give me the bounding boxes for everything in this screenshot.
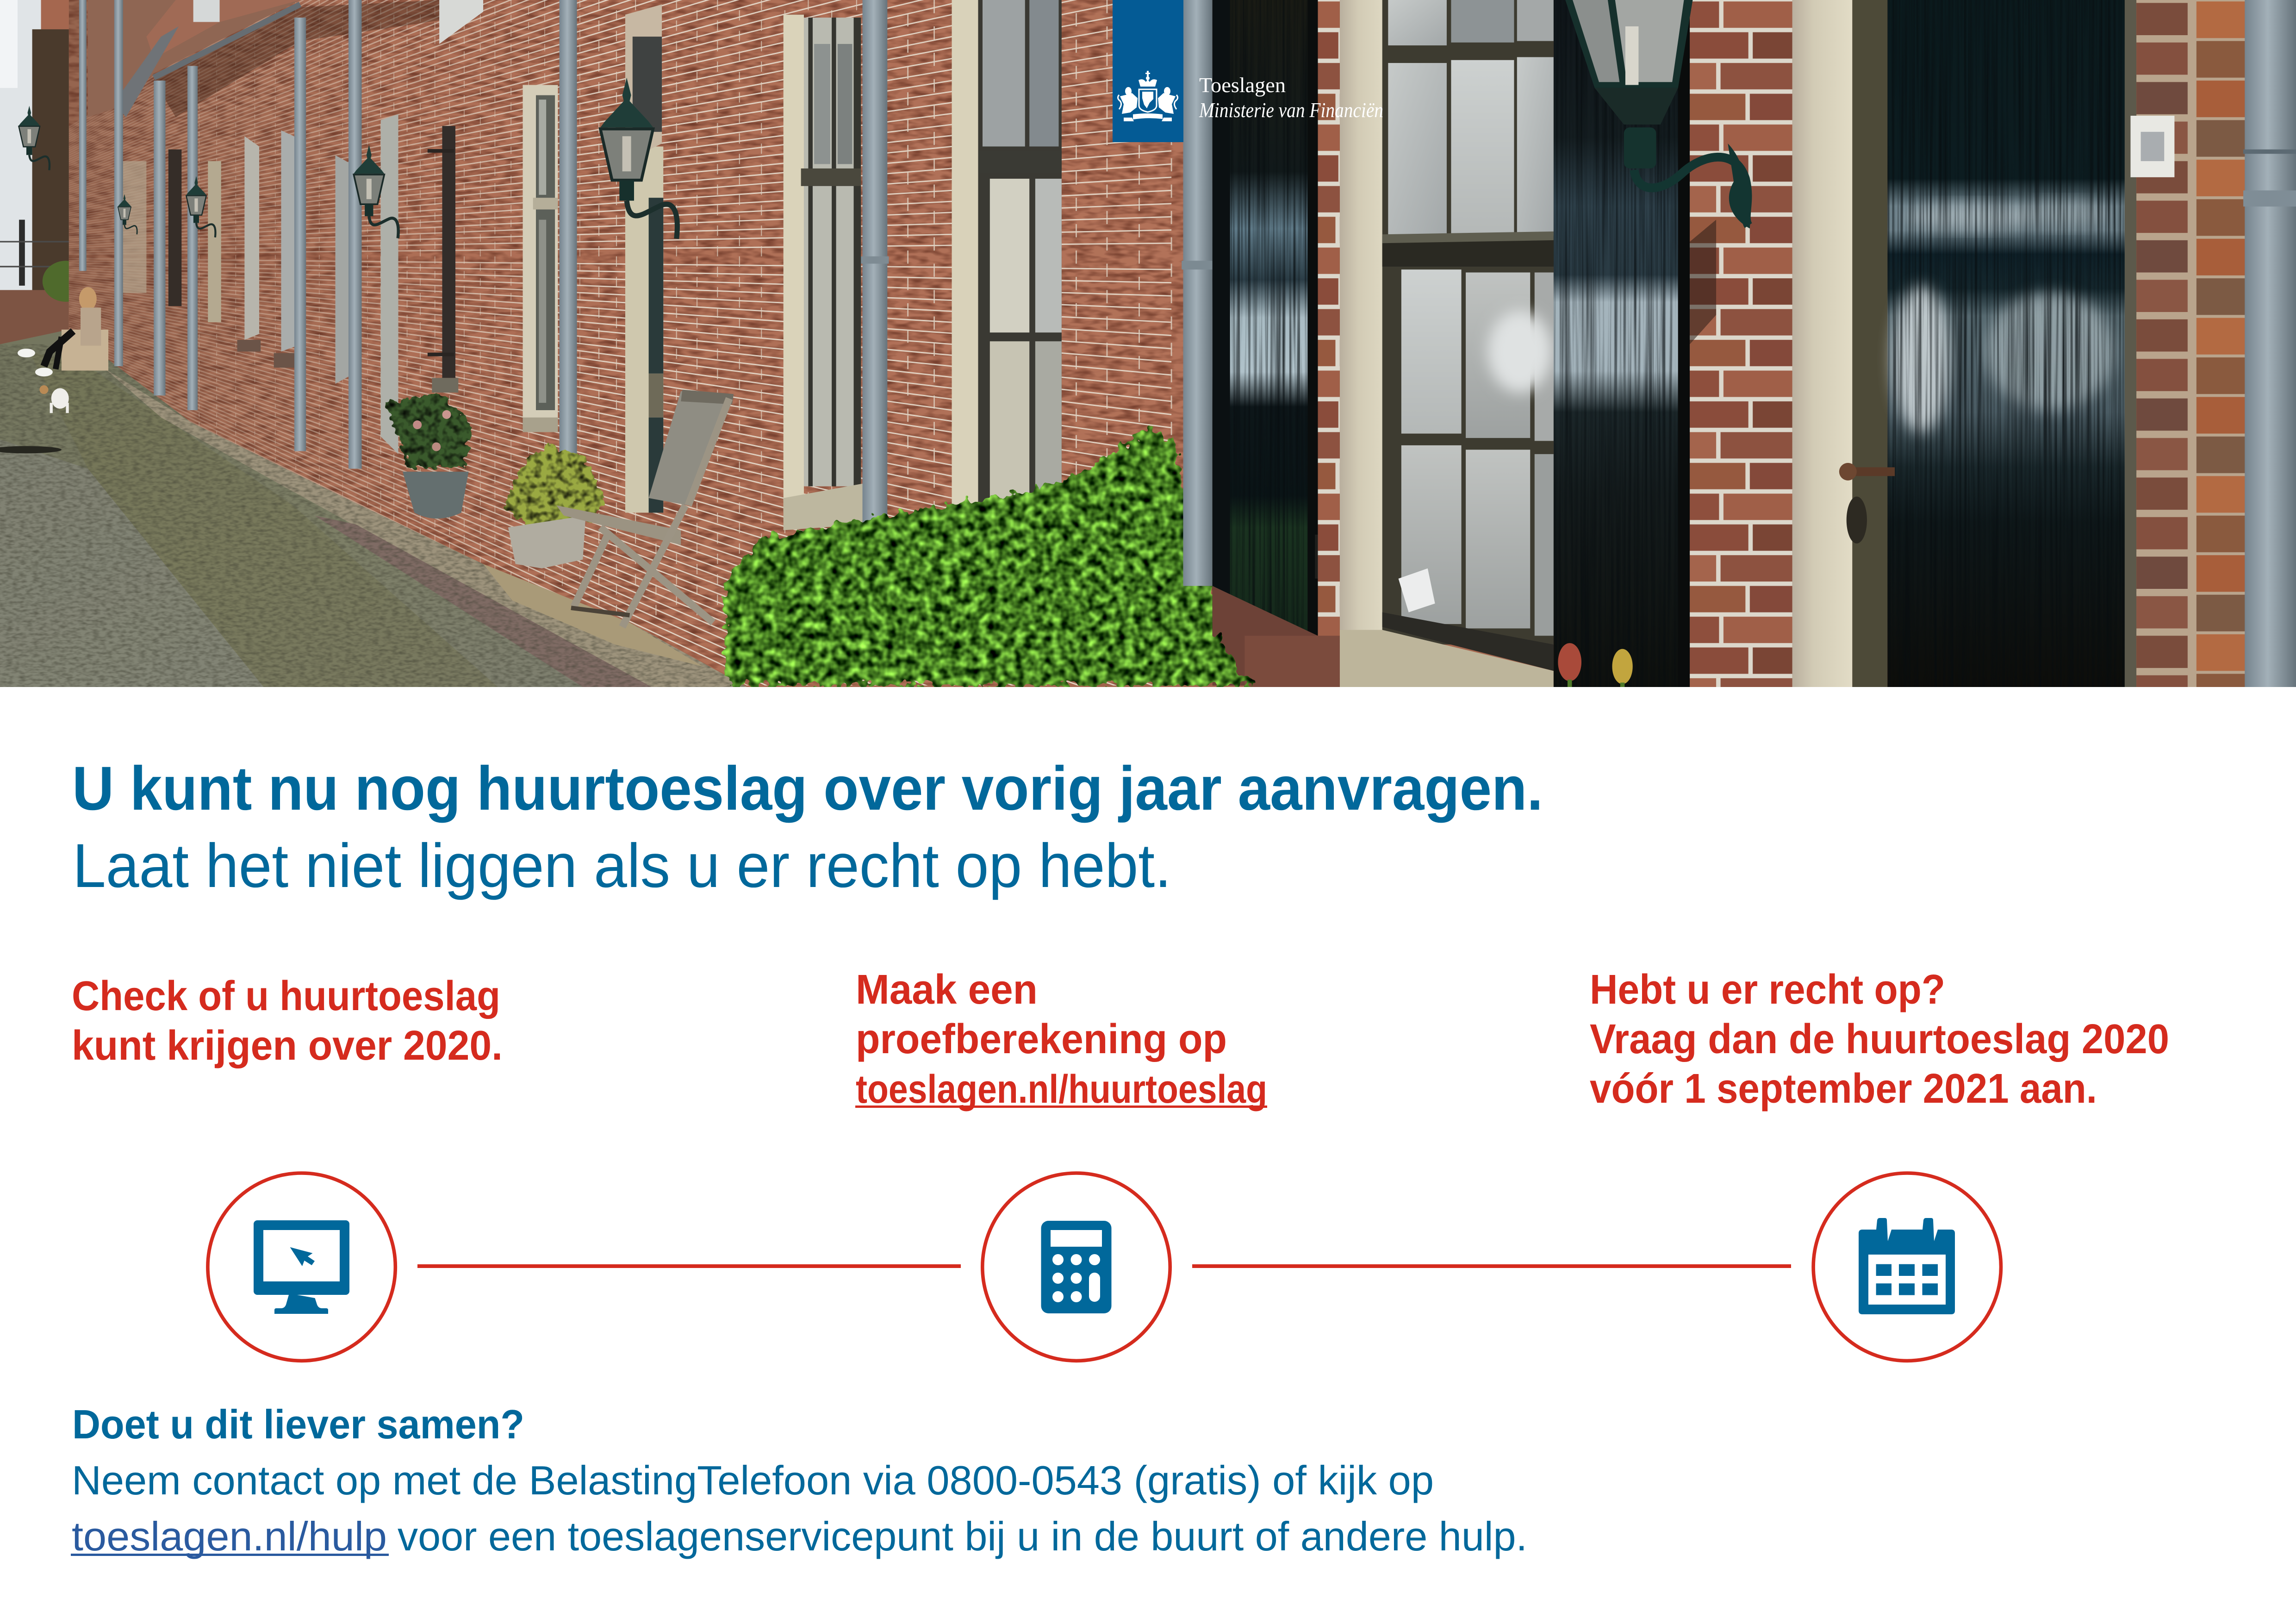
black glossy door — [1839, 0, 2136, 687]
icon: calendar — [1813, 1173, 2001, 1361]
far windows and shutters — [117, 114, 458, 454]
red brick gutter strip — [315, 516, 652, 687]
step 3 text: Vraag dan de huurtoeslag 2020 — [1590, 1016, 2169, 1062]
step 2 text: toeslagen.nl/huurtoeslag — [856, 1067, 1267, 1112]
heading line bold: U kunt nu nog huurtoeslag over vorig jaar aanvragen. — [72, 754, 1543, 823]
brick pier between shutter and window — [1171, 0, 1340, 687]
step 1 text — [72, 973, 503, 1069]
step 2 text — [855, 967, 1267, 1112]
step 1 text: Check of u huurtoeslag — [72, 973, 500, 1019]
downpipes — [79, 0, 889, 525]
black shutter left — [1213, 0, 1340, 686]
wooden folding bench — [556, 390, 734, 627]
step 3 text — [1590, 967, 2169, 1112]
right downpipe near shutter — [1182, 0, 1214, 586]
black shutter right — [1554, 0, 1690, 687]
step 2 text: Maak een — [856, 967, 1038, 1013]
brick column right — [2130, 0, 2248, 687]
connector line 2 — [1192, 1264, 1791, 1268]
coat of arms — [1118, 71, 1178, 121]
logo text: Toeslagen — [1199, 73, 1286, 97]
photo: brick houses along a cobbled street — [0, 0, 2296, 687]
contact heading: Doet u dit liever samen? — [72, 1401, 524, 1447]
step 3 text: Hebt u er recht op? — [1590, 967, 1945, 1013]
drainpipe far right — [2243, 0, 2296, 687]
logo blue ribbon — [1113, 0, 1183, 142]
help link: toeslagen.nl/hulp — [72, 1513, 387, 1559]
icon: calculator — [983, 1173, 1170, 1361]
far white building and dark hedge — [0, 0, 89, 356]
logo: Rijksoverheid ribbon with coat of arms — [1113, 0, 1383, 142]
step 2 text: proefberekening op — [856, 1016, 1227, 1062]
contact block — [71, 1401, 1527, 1559]
large sash window — [1340, 0, 1554, 687]
logo ministry text: Ministerie van Financiën — [1199, 98, 1383, 122]
brick pier beside door — [1690, 0, 1792, 687]
contact sentence line 1: Neem contact op met de BelastingTelefoon via 0800-0543 (gratis) of kijk op — [72, 1457, 1434, 1503]
flowers at window base — [1558, 643, 1633, 687]
big lantern with bracket — [1565, 0, 1750, 229]
roof, eaves and top shadow — [88, 0, 483, 117]
wall lanterns — [19, 78, 677, 239]
step 1 text: kunt krijgen over 2020. — [72, 1023, 503, 1069]
ivy hedge — [725, 428, 1257, 686]
person on bench and small dog — [18, 287, 108, 413]
step 3 text: vóór 1 september 2021 aan. — [1590, 1066, 2097, 1112]
potted plant — [385, 393, 472, 518]
brick wall left house row — [68, 0, 1213, 686]
icon: computer monitor with cursor — [208, 1173, 395, 1361]
middle windows — [523, 0, 1062, 530]
connector line 1 — [417, 1264, 961, 1268]
title — [72, 754, 1543, 900]
cream door frame — [1792, 0, 1887, 687]
stone planter with yellow shrub — [505, 444, 605, 568]
contact sentence line 2: voor een toeslagenservicepunt bij u in de buurt of andere hulp. — [398, 1513, 1527, 1559]
pebble sidewalk band — [106, 369, 747, 687]
heading line regular: Laat het niet liggen als u er recht op hebt. — [73, 831, 1171, 900]
cobblestone street — [0, 330, 747, 687]
